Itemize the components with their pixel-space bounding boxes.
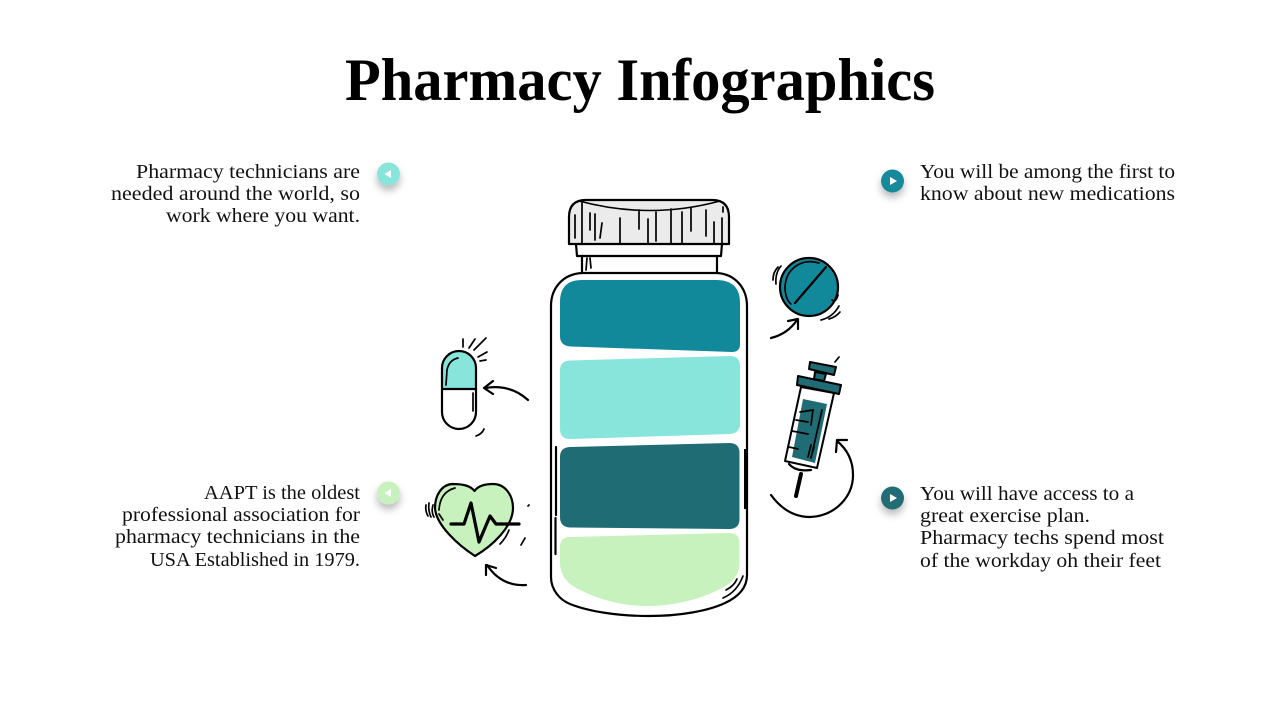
text block: bottom left: USA Established in 1979. <box>150 549 360 571</box>
icon: teal right bullet <box>881 170 904 192</box>
text block: bottom left: pharmacy technicians in the <box>115 526 360 548</box>
segment: mint <box>560 356 740 439</box>
text block: top right: know about new medications <box>920 183 1175 205</box>
icon: dark teal right bullet <box>881 486 904 510</box>
icon: tablet <box>773 258 840 320</box>
arrow: to capsule <box>484 381 528 400</box>
bottle collar <box>576 244 722 256</box>
icon: green left bullet <box>377 482 400 504</box>
icon: capsule <box>442 338 487 436</box>
icon: mint left bullet <box>377 162 400 186</box>
arrow: to tablet <box>771 319 798 338</box>
text block: bottom right: great exercise plan. <box>920 505 1090 527</box>
bottle cap <box>569 200 729 244</box>
bottle neck <box>582 256 717 273</box>
bottle body outline <box>551 273 747 616</box>
icon: syringe <box>785 357 841 496</box>
arrow: around syringe <box>771 440 853 517</box>
text block: top left: work where you want. <box>166 205 360 227</box>
text block: bottom right: You will have access to a <box>920 483 1134 505</box>
text block: top left <box>111 161 360 227</box>
text block: bottom right: Pharmacy techs spend most <box>920 527 1164 549</box>
icon: heart <box>426 484 529 556</box>
title: Pharmacy Infographics <box>345 47 935 113</box>
text block: top left: needed around the world, so <box>111 183 360 205</box>
text block: bottom left <box>115 482 360 571</box>
bottle illustration <box>551 200 747 616</box>
text block: bottom left: AAPT is the oldest <box>204 482 360 504</box>
text block: bottom right: of the workday oh their feet <box>920 550 1161 572</box>
segment: dark teal <box>560 443 740 529</box>
text block: top left: Pharmacy technicians are <box>136 161 360 183</box>
text block: bottom right <box>920 483 1164 572</box>
text block: top right <box>920 161 1175 205</box>
segment: teal <box>560 280 740 352</box>
text block: top right: You will be among the first to <box>920 161 1175 183</box>
arrow: to heart <box>486 565 526 585</box>
segment: light green <box>560 533 740 606</box>
glass highlights <box>554 447 557 554</box>
text block: bottom left: professional association for <box>122 504 360 526</box>
